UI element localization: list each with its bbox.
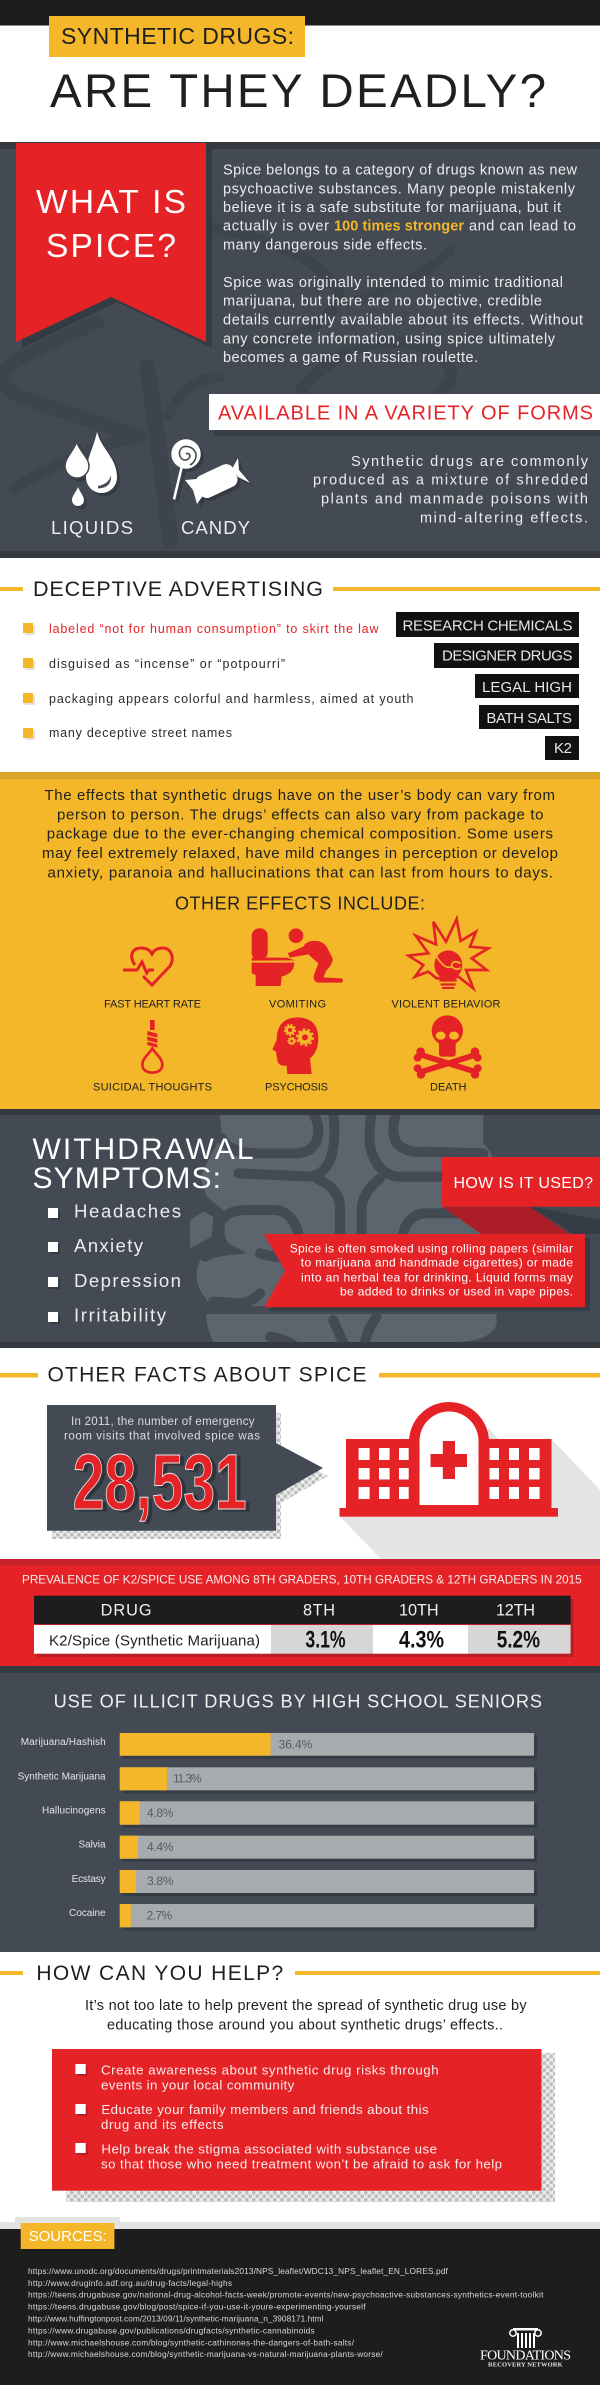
panel: illicit drug use chart xyxy=(0,1666,600,1952)
heading: deceptive advertising xyxy=(0,577,600,601)
text block: effects intro: may feel extremely relaxed, have mild changes in perception or develop xyxy=(42,845,558,862)
background brain xyxy=(190,1112,497,1350)
text block: spice description: many dangerous side effects. xyxy=(223,237,427,253)
table: prevalence by grade: 5.2% xyxy=(497,1627,540,1654)
list: symptoms: Anxiety xyxy=(74,1235,144,1256)
panel: effects xyxy=(0,772,600,1109)
table: prevalence by grade xyxy=(34,1596,574,1657)
panel: withdrawal symptoms xyxy=(0,1109,600,1350)
text block: synthetic drugs mixture: Synthetic drugs are commonly xyxy=(351,454,589,470)
logo: foundations recovery network xyxy=(480,2328,571,2369)
list: source urls xyxy=(28,2266,544,2359)
list: symptoms: Irritability xyxy=(74,1305,167,1326)
text block: spice description: Spice belongs to a category of drugs known as new xyxy=(223,162,578,178)
table: prevalence by grade: DRUG xyxy=(101,1602,152,1620)
text block: synthetic drugs mixture: plants and manmade poisons with xyxy=(321,491,588,507)
text block: spice description: Spice was originally intended to mimic traditional xyxy=(223,275,563,291)
bar: synthetic marijuana: 11.3% xyxy=(173,1771,202,1785)
section: deceptive advertising xyxy=(0,577,600,760)
table: prevalence by grade: 10TH xyxy=(399,1602,439,1620)
bar: hallucinogens: Hallucinogens xyxy=(42,1805,106,1816)
text block: help intro xyxy=(85,1998,527,2033)
text block: help intro: It’s not too late to help prevent the spread of synthetic drug use by xyxy=(85,1998,527,2014)
label: liquids: LIQUIDS xyxy=(51,517,133,538)
callout: emergency room visits xyxy=(47,1405,328,1539)
bar: cocaine xyxy=(69,1904,537,1930)
list: source urls: http://www.michaelshouse.com/blog/synthetic-cathinones-the-dangers-of-bath-salts/ xyxy=(28,2337,355,2347)
list: source urls: http://www.huffingtonpost.com/2013/09/11/synthetic-marijuana_n_3908171.html xyxy=(28,2313,324,2323)
stat: 28,531: 28,531 xyxy=(73,1437,247,1526)
table: prevalence by grade: 12TH xyxy=(496,1602,535,1620)
bar chart: drug use xyxy=(18,1733,537,1930)
section: how can you help xyxy=(0,1962,600,2202)
text block: spice description xyxy=(223,162,583,366)
bar: salvia: 4.4% xyxy=(147,1840,174,1854)
icon: noose xyxy=(142,1020,162,1073)
bar: salvia xyxy=(78,1836,537,1862)
panel: what is spice xyxy=(0,142,600,558)
text block: spice description: marijuana, but there are no objective, credible xyxy=(223,294,542,310)
callout: how is it used: HOW IS IT USED? xyxy=(454,1175,593,1192)
tags: street names: RESEARCH CHEMICALS xyxy=(402,618,572,635)
label: vomiting: VOMITING xyxy=(269,999,326,1011)
bar: ecstasy: Ecstasy xyxy=(72,1874,106,1885)
heading: sources xyxy=(21,2223,114,2249)
ribbon: how spice is used: be added to drinks or used in vape pipes. xyxy=(340,1285,573,1299)
bar: synthetic marijuana: Synthetic Marijuana xyxy=(18,1771,106,1782)
icon: heart rate xyxy=(123,948,172,985)
label: candy: CANDY xyxy=(181,517,250,538)
text block: synthetic drugs mixture xyxy=(313,454,589,526)
bar: cocaine: 2.7% xyxy=(147,1908,173,1922)
ribbon: how spice is used: Spice is often smoked using rolling papers (similar xyxy=(290,1241,573,1255)
list: symptoms: Headaches xyxy=(74,1201,181,1222)
panel: help actions: events in your local community xyxy=(101,2077,295,2092)
heading: other facts xyxy=(0,1364,600,1387)
heading: sources: SOURCES: xyxy=(29,2228,107,2245)
heading: how can you help: HOW CAN YOU HELP? xyxy=(36,1962,283,1985)
ribbon: how spice is used xyxy=(264,1234,590,1311)
text block: effects intro: The effects that synthetic drugs have on the user’s body can vary from xyxy=(44,787,555,804)
heading: withdrawal symptoms: SYMPTOMS: xyxy=(32,1162,221,1195)
heading: are they deadly: ARE THEY DEADLY? xyxy=(50,65,546,118)
tags: street names xyxy=(396,612,579,760)
callout: emergency room visits: room visits that involved spice was xyxy=(64,1430,260,1442)
table: prevalence by grade: K2/Spice (Synthetic Marijuana) xyxy=(49,1633,260,1650)
callout: emergency room visits: In 2011, the number of emergency xyxy=(71,1416,255,1428)
section: other facts about spice xyxy=(0,1364,600,1559)
ribbon: how spice is used: into an herbal tea for drinking. Liquid forms may xyxy=(301,1270,573,1284)
tags: street names: K2 xyxy=(554,740,572,757)
icon: psychosis head xyxy=(272,1017,318,1074)
icon: candy xyxy=(171,439,250,504)
panel: help actions: Create awareness about synthetic drug risks through xyxy=(101,2062,439,2077)
bar: marijuana xyxy=(21,1733,537,1759)
label: suicidal thoughts: SUICIDAL THOUGHTS xyxy=(93,1082,212,1094)
heading: withdrawal symptoms: WITHDRAWAL xyxy=(32,1133,254,1166)
ribbon: how spice is used: to marijuana and handmade cigarettes) or made xyxy=(301,1256,573,1270)
icon: liquids drops xyxy=(65,432,117,506)
background script swirl xyxy=(3,228,451,540)
list: source urls: https://teens.drugabuse.gov/national-drug-alcohol-facts-week/promote-events/new-psychoactive-substances-synthetics-event-toolkit xyxy=(28,2290,544,2300)
heading: prevalence: PREVALENCE OF K2/SPICE USE AMONG 8TH GRADERS, 10TH GRADERS & 12TH GRADERS IN 2015 xyxy=(22,1573,582,1586)
footer: sources xyxy=(0,2217,600,2385)
text block: synthetic drugs mixture: produced as a mixture of shredded xyxy=(313,473,588,489)
table: prevalence by grade: 3.1% xyxy=(305,1627,346,1654)
label: violent behavior: VIOLENT BEHAVIOR xyxy=(392,999,501,1011)
list: source urls: http://www.michaelshouse.com/blog/synthetic-marijuana-vs-natural-marijuana-plants-worse/ xyxy=(28,2349,383,2359)
logo: foundations recovery network: FOUNDATIONS xyxy=(480,2349,571,2364)
panel: help actions: drug and its effects xyxy=(101,2117,224,2132)
label: psychosis: PSYCHOSIS xyxy=(265,1082,328,1094)
bar: ecstasy xyxy=(72,1870,537,1896)
icon: skull and crossbones xyxy=(414,1015,482,1079)
label: death: DEATH xyxy=(430,1082,467,1094)
bar: ecstasy: 3.8% xyxy=(147,1874,174,1888)
text block: effects intro xyxy=(42,787,558,881)
panel: prevalence table xyxy=(0,1559,600,1666)
text block: spice description: details currently available about its effects. Without xyxy=(223,312,583,328)
panel: help actions: Help break the stigma associated with substance use xyxy=(101,2142,437,2157)
list: deceptive tactics xyxy=(23,622,414,740)
list: symptoms xyxy=(48,1201,181,1326)
panel: help actions xyxy=(52,2049,555,2202)
list: source urls: https://teens.drugabuse.gov/blog/post/spice-if-you-use-it-youre-experimenting-yourself xyxy=(28,2302,366,2312)
list: deceptive tactics: packaging appears colorful and harmless, aimed at youth xyxy=(49,692,414,706)
callout: how is it used xyxy=(442,1157,600,1234)
banner: available in a variety of forms xyxy=(209,394,600,436)
heading: how can you help xyxy=(0,1962,600,1985)
panel: help actions: so that those who need treatment won’t be afraid to ask for help xyxy=(101,2157,502,2172)
ribbon: what is spice xyxy=(16,143,212,348)
text block: synthetic drugs mixture: mind-altering effects. xyxy=(420,510,588,526)
text block: spice description: believe it is a safe substitute for marijuana, but it xyxy=(223,200,561,216)
heading: deceptive advertising: DECEPTIVE ADVERTISING xyxy=(33,577,323,601)
heading: other effects include: OTHER EFFECTS INCLUDE: xyxy=(175,893,425,913)
heading: other facts: OTHER FACTS ABOUT SPICE xyxy=(48,1364,366,1387)
bar: hallucinogens: 4.8% xyxy=(147,1806,174,1820)
tags: street names: LEGAL HIGH xyxy=(482,679,572,696)
banner: available in a variety of forms: AVAILABLE IN A VARIETY OF FORMS xyxy=(218,402,593,424)
text block: spice description: 100 times stronger xyxy=(334,219,464,235)
bar: salvia: Salvia xyxy=(78,1840,106,1851)
table: prevalence by grade: 4.3% xyxy=(399,1627,444,1654)
list: source urls: https://www.drugabuse.gov/publications/drugfacts/synthetic-cannabinoids xyxy=(28,2325,315,2335)
table: prevalence by grade: 8TH xyxy=(303,1602,335,1620)
list: deceptive tactics: many deceptive street names xyxy=(49,726,232,740)
icon: hospital xyxy=(340,1402,600,1559)
bar: synthetic marijuana xyxy=(18,1767,537,1793)
list: source urls: http://www.druginfo.adf.org.au/drug-facts/legal-highs xyxy=(28,2278,232,2288)
text block: spice description: becomes a game of Russian roulette. xyxy=(223,350,478,366)
header: title block xyxy=(0,0,600,118)
bar: hallucinogens xyxy=(42,1801,537,1828)
text block: effects intro: package due to the ever-changing chemical composition. Some users xyxy=(47,826,553,843)
list: source urls: https://www.unodc.org/documents/drugs/printmaterials2013/NPS_leaflet/WDC13_NPS_leaflet_EN_LORES.pdf xyxy=(28,2266,448,2276)
tags: street names: BATH SALTS xyxy=(486,710,572,727)
ribbon: what is spice: WHAT IS xyxy=(36,184,186,221)
ribbon: what is spice: SPICE? xyxy=(46,228,176,265)
text block: spice description: any concrete information, using spice ultimately xyxy=(223,331,556,347)
bar: marijuana: 36.4% xyxy=(279,1737,313,1751)
tags: street names: DESIGNER DRUGS xyxy=(442,648,572,665)
text block: spice description: actually is over xyxy=(223,219,329,235)
text block: help intro: educating those around you about synthetic drugs’ effects.. xyxy=(107,2017,503,2033)
list: deceptive tactics: disguised as “incense” or “potpourri” xyxy=(49,657,285,671)
bar: marijuana: Marijuana/Hashish xyxy=(21,1737,106,1748)
icon: vomiting xyxy=(252,928,343,986)
label: fast heart rate: FAST HEART RATE xyxy=(104,999,201,1011)
panel: help actions: Educate your family members and friends about this xyxy=(101,2102,429,2117)
text block: effects intro: anxiety, paranoia and hallucinations that can last from hours to days. xyxy=(48,864,553,881)
heading: use of illicit drugs: USE OF ILLICIT DRUGS BY HIGH SCHOOL SENIORS xyxy=(54,1692,542,1712)
heading: withdrawal symptoms xyxy=(32,1133,254,1195)
heading: synthetic drugs: SYNTHETIC DRUGS: xyxy=(61,23,294,49)
bar: cocaine: Cocaine xyxy=(69,1908,106,1919)
text block: spice description: and can lead to xyxy=(469,219,576,235)
icon: violent behavior xyxy=(408,919,488,989)
list: deceptive tactics: labeled “not for human consumption” to skirt the law xyxy=(49,622,379,636)
logo: foundations recovery network: RECOVERY NETWORK xyxy=(488,2362,563,2369)
text block: spice description: psychoactive substances. Many people mistakenly xyxy=(223,181,576,197)
text block: effects intro: person to person. The drugs’ effects can also vary from package to xyxy=(57,806,544,823)
list: symptoms: Depression xyxy=(74,1270,181,1291)
